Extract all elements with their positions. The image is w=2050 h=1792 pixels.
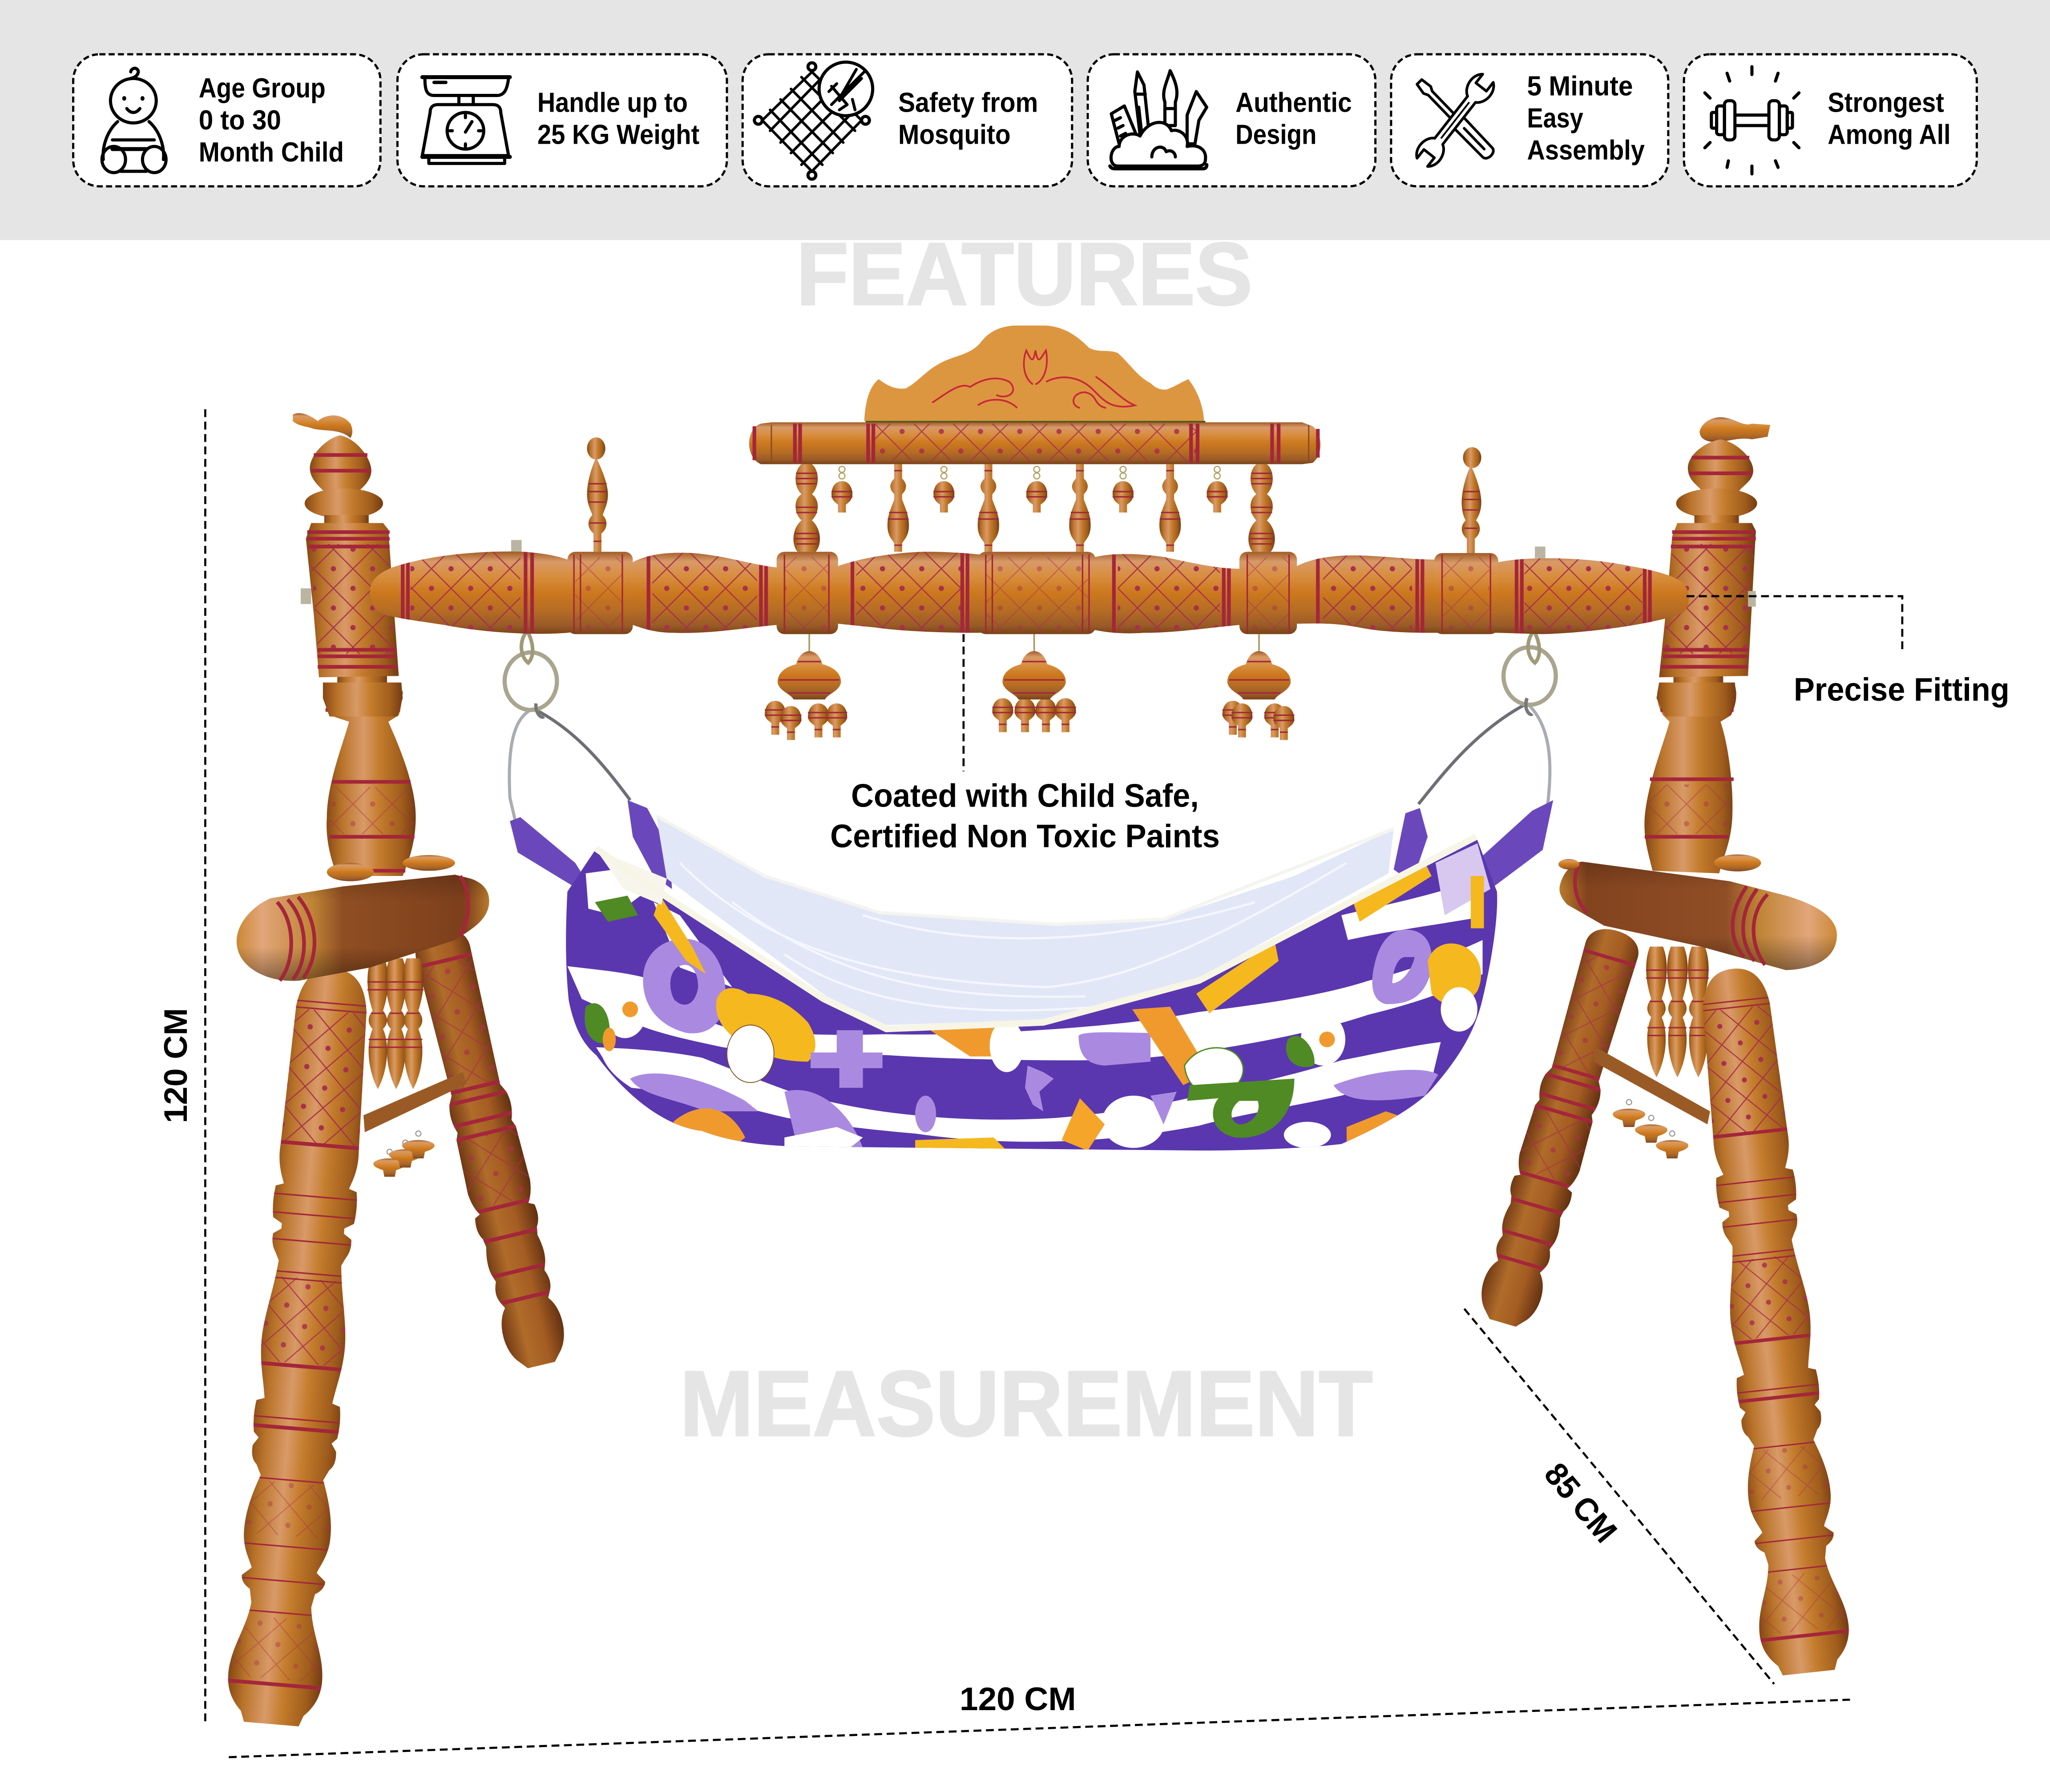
heading: features: FEATURES: [796, 225, 1252, 324]
right post bulb: [1644, 685, 1736, 873]
right post bulb stripes: [1645, 693, 1736, 837]
lavender plus: [811, 1030, 883, 1088]
spindles under rail: [793, 464, 1275, 552]
left inner wire: [533, 709, 630, 800]
net folds: [680, 863, 1347, 1010]
text: assembly: Assembly: [1527, 135, 1645, 166]
text: weight: [537, 87, 699, 150]
left post lattice: [310, 544, 395, 654]
text: weight: 25 KG Weight: [537, 119, 699, 150]
right spindles: [1646, 947, 1709, 1078]
yellow elephant: [716, 988, 815, 1061]
upper rail: [749, 422, 1320, 464]
left character: [585, 981, 647, 1051]
panel: age group: [73, 54, 380, 186]
rail bands: [771, 425, 1309, 463]
rail top edge: [865, 421, 1206, 422]
text: age group: Month Child: [199, 137, 344, 168]
left post bands: [307, 532, 397, 667]
left stretcher: [363, 1072, 467, 1132]
left post bulb pattern: [328, 787, 415, 834]
text: authentic design: Design: [1235, 119, 1316, 150]
dimension: vertical height line: [205, 409, 206, 1726]
dimension: width line: [229, 1699, 1850, 1757]
text: assembly: [1527, 71, 1645, 166]
orange bar: [1132, 1007, 1209, 1085]
icon: baby: [102, 68, 166, 173]
callout: paint: Certified Non Toxic Paints: [830, 817, 1220, 854]
orange wedge: [928, 1028, 1007, 1057]
right wire hanger: [1419, 703, 1527, 804]
right post cylinder: [1659, 523, 1756, 677]
left clasp: [536, 703, 544, 717]
right character: [1286, 1013, 1345, 1067]
right top print: [1436, 844, 1490, 928]
callout: precise fitting: Precise Fitting: [1794, 671, 2010, 708]
lavender O right: [1372, 930, 1432, 1004]
left post ball: [310, 436, 371, 492]
headboard: [864, 326, 1204, 421]
dimension label: width: 120 CM: [960, 1680, 1076, 1717]
left post lower neck: [337, 672, 387, 688]
cradle frame: rear legs and spindles: [363, 922, 1710, 1373]
right post ball: [1688, 439, 1753, 492]
left post head: [293, 413, 403, 717]
left front leg: [223, 965, 383, 1728]
left crossbar shade: [237, 875, 489, 981]
center kitty: [990, 1020, 1024, 1072]
yellow right: [1428, 944, 1481, 1005]
right crossbar bands: [1575, 863, 1768, 965]
right post finial: [1699, 417, 1770, 442]
callout: paint: [830, 777, 1220, 854]
left post ball bands: [311, 455, 371, 471]
right rear leg: [1471, 922, 1649, 1332]
decorative top rail assembly: [587, 326, 1481, 557]
callout line: precise fitting: [1687, 596, 1902, 654]
left crossbar: [237, 875, 489, 981]
icon: scale: [422, 77, 510, 163]
text: mosquito safety: Mosquito: [898, 119, 1011, 150]
left front frame: [223, 685, 489, 1728]
panel: weight: [397, 54, 727, 186]
net top piping: [656, 816, 1394, 924]
left post bulb: [326, 685, 416, 876]
right crossbar shade: [1559, 862, 1837, 970]
right front leg: [1687, 964, 1854, 1678]
straps: [510, 800, 1553, 909]
right post lower neck: [1674, 672, 1723, 688]
white flap: [596, 850, 667, 905]
left pegs: [327, 855, 455, 881]
hammock: [509, 703, 1553, 1150]
left top print: [586, 869, 641, 922]
header band: [0, 0, 2050, 240]
right ring: [1504, 647, 1556, 705]
small bells under bell 3: [1223, 701, 1294, 740]
right post lattice: [1663, 544, 1755, 654]
right post neck: [1695, 515, 1739, 525]
right hook: [1528, 633, 1539, 663]
hanging bell 1: [778, 634, 841, 699]
icon: dumbbell: [1705, 67, 1799, 174]
beam decoration: [403, 549, 1650, 635]
callout: paint: Coated with Child Safe,: [851, 777, 1199, 814]
text: assembly: 5 Minute: [1527, 71, 1633, 102]
icon: wrench and screwdriver: [1412, 71, 1498, 170]
ring pattern: [575, 557, 1489, 630]
text: weight: Handle up to: [537, 87, 688, 118]
text: strength: Among All: [1828, 119, 1951, 150]
text: authentic design: [1235, 87, 1352, 150]
rings: [504, 633, 1556, 717]
left hook: [521, 633, 533, 663]
main beam: [301, 540, 1756, 635]
hanging bell 3: [1227, 634, 1291, 699]
right stretcher: [1594, 1046, 1710, 1124]
headboard ornament: [932, 351, 1135, 408]
right kitty: [1441, 987, 1477, 1032]
left ring: [504, 653, 557, 710]
right finial: [1462, 447, 1481, 557]
orange shapes lower: [673, 1108, 745, 1148]
white piping edge: [596, 837, 1476, 1029]
panel: authentic design: [1088, 54, 1376, 186]
left finial: [587, 437, 608, 552]
left spindles: [367, 958, 424, 1089]
icon: net with mosquito: [755, 62, 873, 179]
left rear leg: [406, 923, 574, 1373]
text: age group: [199, 73, 344, 168]
text: mosquito safety: Safety from: [898, 87, 1038, 118]
left kitty: [727, 1025, 774, 1082]
right pegs: [1558, 855, 1761, 872]
right post lower collar: [1656, 682, 1736, 717]
lavender blobs: [630, 1074, 758, 1111]
callout line: paint: [963, 634, 964, 771]
beam rings: [567, 552, 1498, 634]
right post bands: [1660, 532, 1756, 667]
left post neck: [324, 515, 369, 525]
right post head: [1656, 417, 1770, 717]
heading: measurement: MEASUREMENT: [680, 1352, 1373, 1456]
left crossbar bands: [277, 876, 468, 981]
left post finial: [293, 413, 352, 438]
left post cylinder: [306, 523, 399, 677]
left wire hanger: [509, 709, 533, 831]
small figures bottom: [784, 1096, 1331, 1150]
text: mosquito safety: [898, 87, 1038, 150]
mosquito net: [656, 816, 1394, 1025]
right crossbar: [1559, 862, 1837, 970]
left post collar: [305, 488, 383, 518]
rail lattice: [873, 424, 1196, 463]
text: authentic design: Authentic: [1235, 87, 1352, 118]
beam body: [370, 552, 1689, 634]
cloth body: [566, 837, 1497, 1150]
right front frame: [1558, 685, 1854, 1678]
right clasp: [1526, 698, 1532, 714]
left post bulb stripes: [324, 693, 415, 871]
icon: art tools in cloud: [1110, 71, 1207, 169]
small bells under bell 1: [765, 701, 847, 740]
left post lower collar: [323, 682, 403, 717]
dimension: depth line: [1464, 1309, 1774, 1684]
dimension label: height: 120 CM: [157, 1008, 194, 1123]
small hanging bells: [831, 466, 1228, 513]
panel: mosquito safety: [743, 54, 1072, 186]
right post ball bands: [1689, 458, 1752, 473]
green O: [1187, 1079, 1294, 1138]
bunny: [1185, 1048, 1243, 1095]
ring bands: [574, 554, 1490, 633]
dimension label: depth: 85 CM: [1537, 1456, 1624, 1550]
orange cone: [1061, 1098, 1105, 1150]
rail red bands: [755, 424, 1318, 463]
text: age group: Age Group: [199, 73, 326, 104]
right post collar: [1676, 488, 1757, 518]
text: strength: Strongest: [1828, 87, 1944, 118]
beam lattice sections: [411, 549, 1642, 635]
cloth print: [567, 844, 1490, 1150]
panel: assembly: [1391, 54, 1668, 186]
text: age group: 0 to 30: [199, 105, 281, 136]
right post bulb pattern: [1646, 784, 1732, 834]
big hanging bells: [765, 634, 1294, 740]
right rear bells: [1613, 1100, 1688, 1158]
lavender O left: [643, 939, 726, 1033]
text: strength: [1828, 87, 1951, 150]
butterfly: [1025, 1066, 1054, 1111]
lavender c: [1078, 1032, 1150, 1066]
carrots and yellow edge: [1196, 941, 1279, 1013]
lavender ears: [1150, 1092, 1177, 1124]
text: assembly: Easy: [1527, 103, 1583, 134]
beam bands: [403, 549, 1650, 635]
left rear bells: [373, 1131, 435, 1177]
bolts: [301, 540, 1756, 607]
hanging bell 2: [1003, 634, 1066, 699]
lower kitty: [1102, 1096, 1165, 1148]
small bells under bell 2: [993, 698, 1076, 732]
right outer wire: [1527, 703, 1550, 821]
panel: strength: [1684, 54, 1977, 186]
